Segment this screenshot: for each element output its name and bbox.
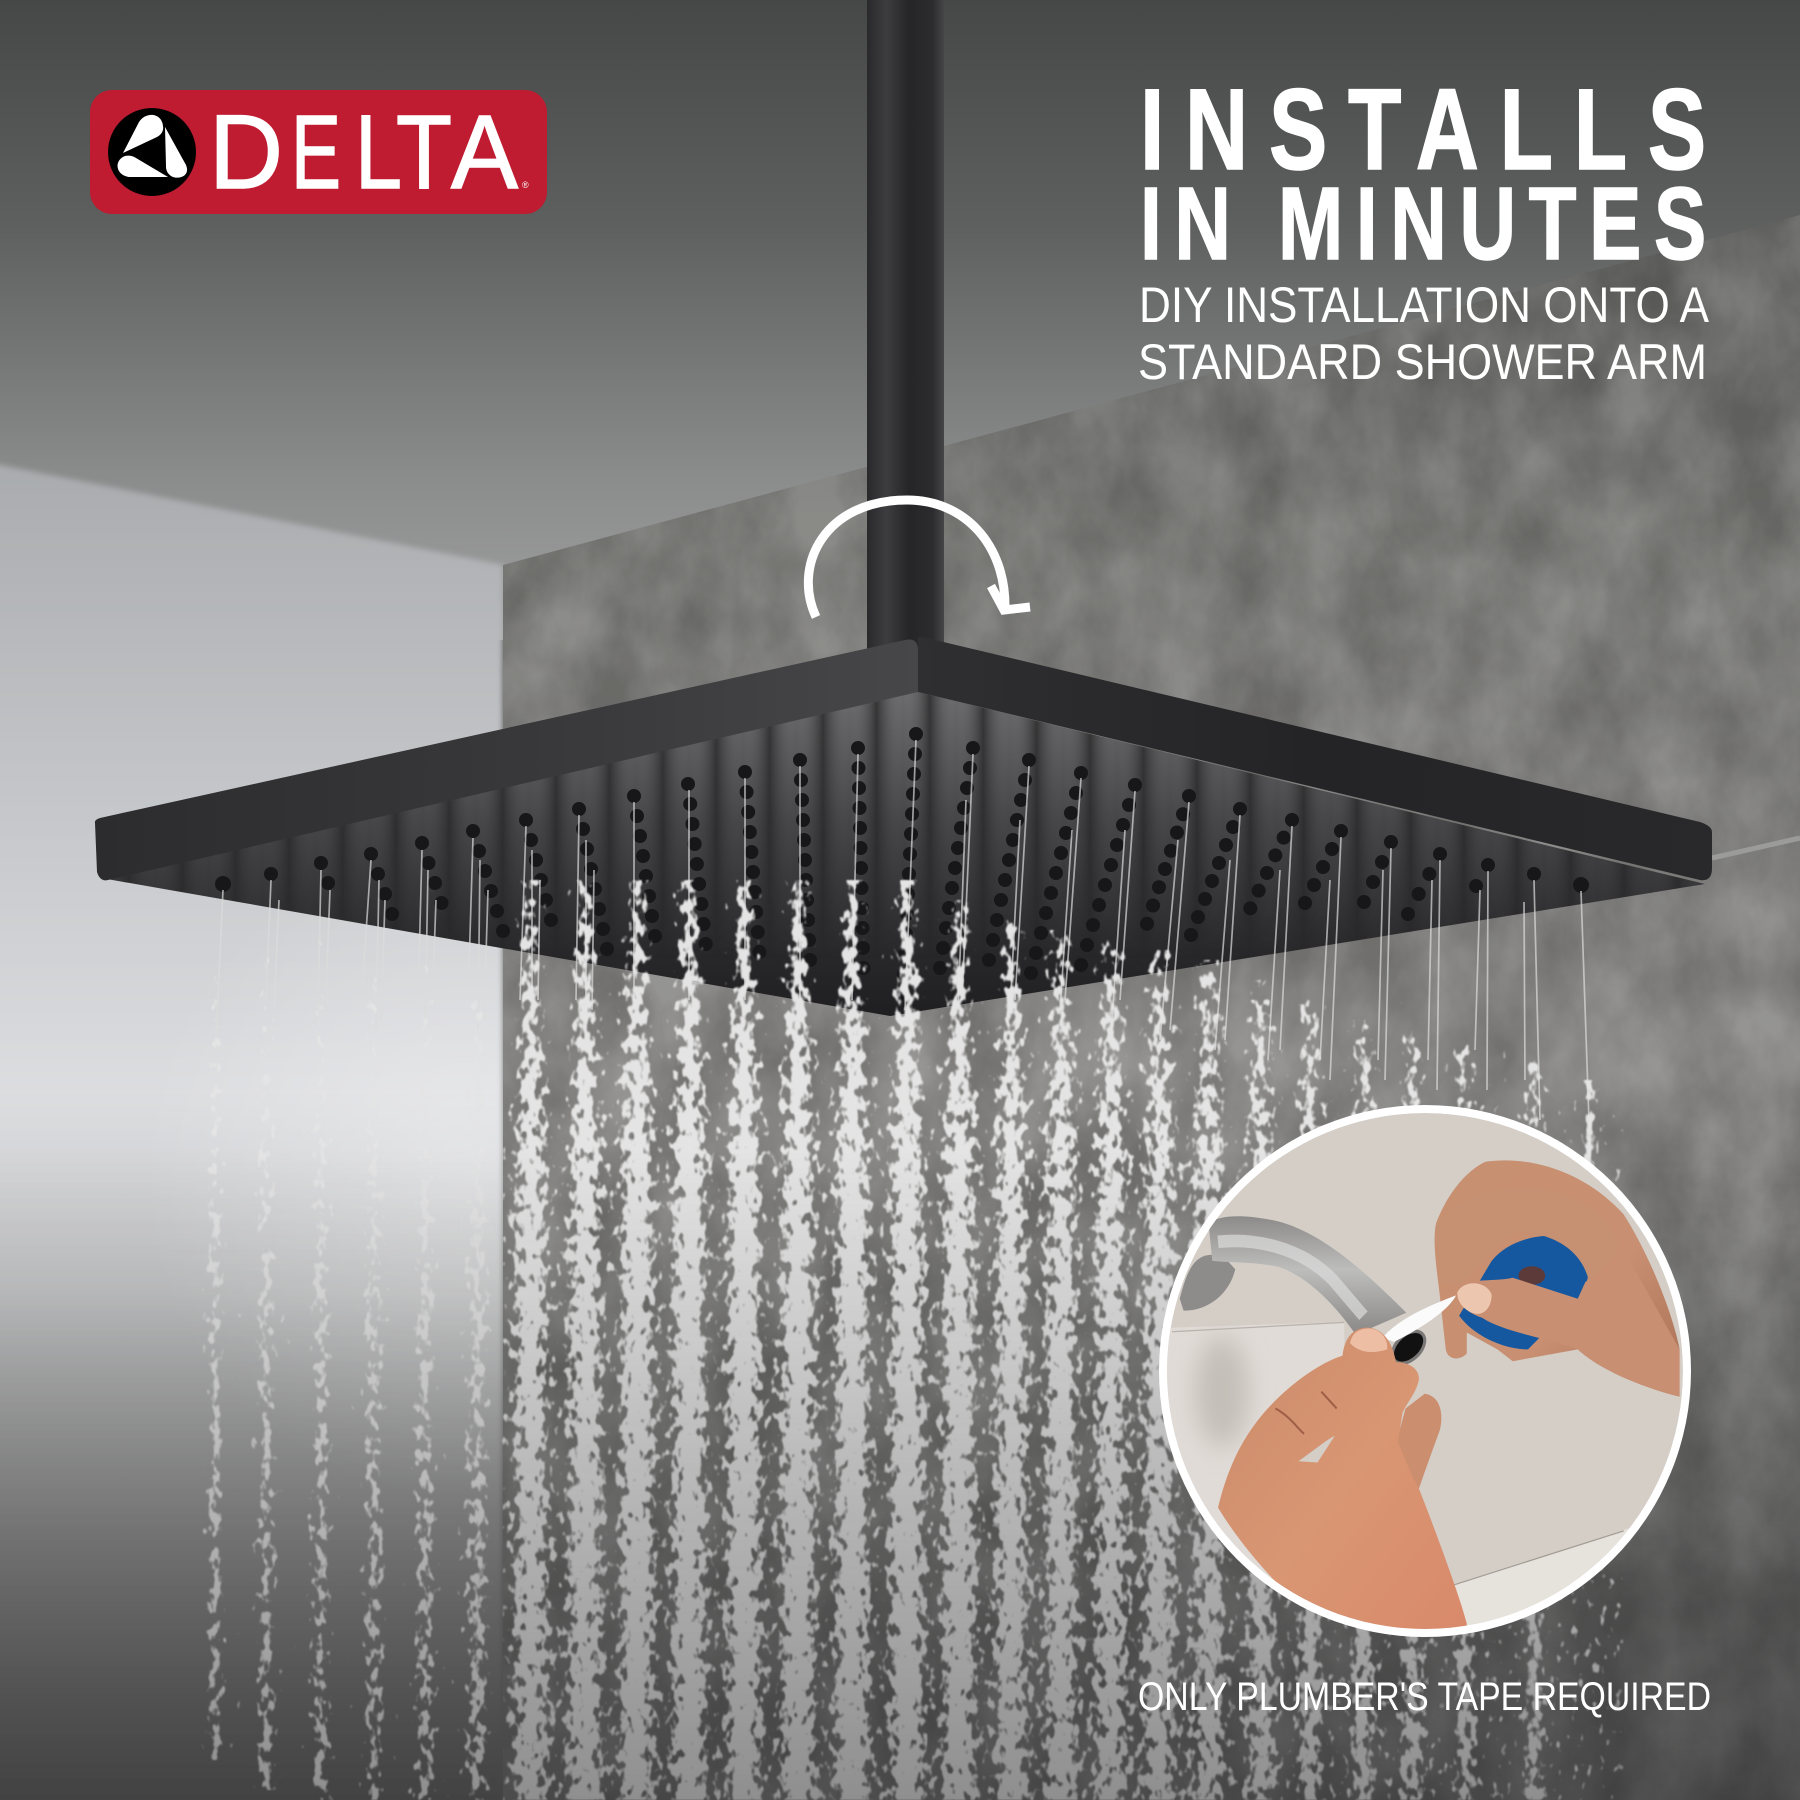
right hand thumb — [1457, 1278, 1680, 1396]
Delta wordmark: E — [291, 94, 341, 211]
shower arm stem — [867, 0, 944, 650]
right hand index finger — [1544, 1236, 1590, 1278]
Delta wordmark: L — [355, 94, 402, 211]
right hand back — [1435, 1160, 1680, 1397]
headline line 1: INSTALLS — [1140, 65, 1706, 194]
Delta wordmark: T — [396, 94, 452, 211]
registered mark: ® — [522, 180, 529, 190]
red badge — [90, 90, 547, 214]
Delta wordmark: D — [209, 94, 283, 211]
rotation arrow — [808, 500, 1030, 617]
left rim — [95, 639, 918, 880]
white tape strip — [1383, 1295, 1456, 1342]
subheading — [1138, 277, 1710, 390]
headline — [1140, 65, 1706, 282]
caption: ONLY PLUMBER'S TAPE REQUIRED — [1138, 1675, 1711, 1719]
Delta triangle emblem — [108, 108, 196, 196]
shower arm pipe — [1180, 1216, 1430, 1370]
left white wall — [0, 461, 503, 1800]
rain shower head — [95, 637, 1720, 1020]
subheading line 1: DIY INSTALLATION ONTO A — [1139, 277, 1710, 333]
underside plate — [100, 680, 1720, 1020]
water streams from nozzles — [215, 740, 1590, 1150]
ceiling — [0, 0, 1800, 640]
inset photo: applying plumber's tape — [1153, 1105, 1704, 1645]
right rim — [918, 637, 1712, 880]
left hand — [1218, 1327, 1467, 1645]
falling water droplets — [200, 880, 1623, 1800]
lower scene shading — [0, 1150, 1800, 1800]
blue tape roll — [1459, 1236, 1589, 1349]
Delta logo badge — [90, 90, 547, 214]
nozzle columns — [215, 734, 1589, 994]
headline line 2: IN MINUTES — [1140, 167, 1706, 282]
Delta wordmark: A — [451, 94, 518, 211]
concrete wall — [503, 215, 1800, 1800]
subheading line 2: STANDARD SHOWER ARM — [1138, 334, 1707, 390]
